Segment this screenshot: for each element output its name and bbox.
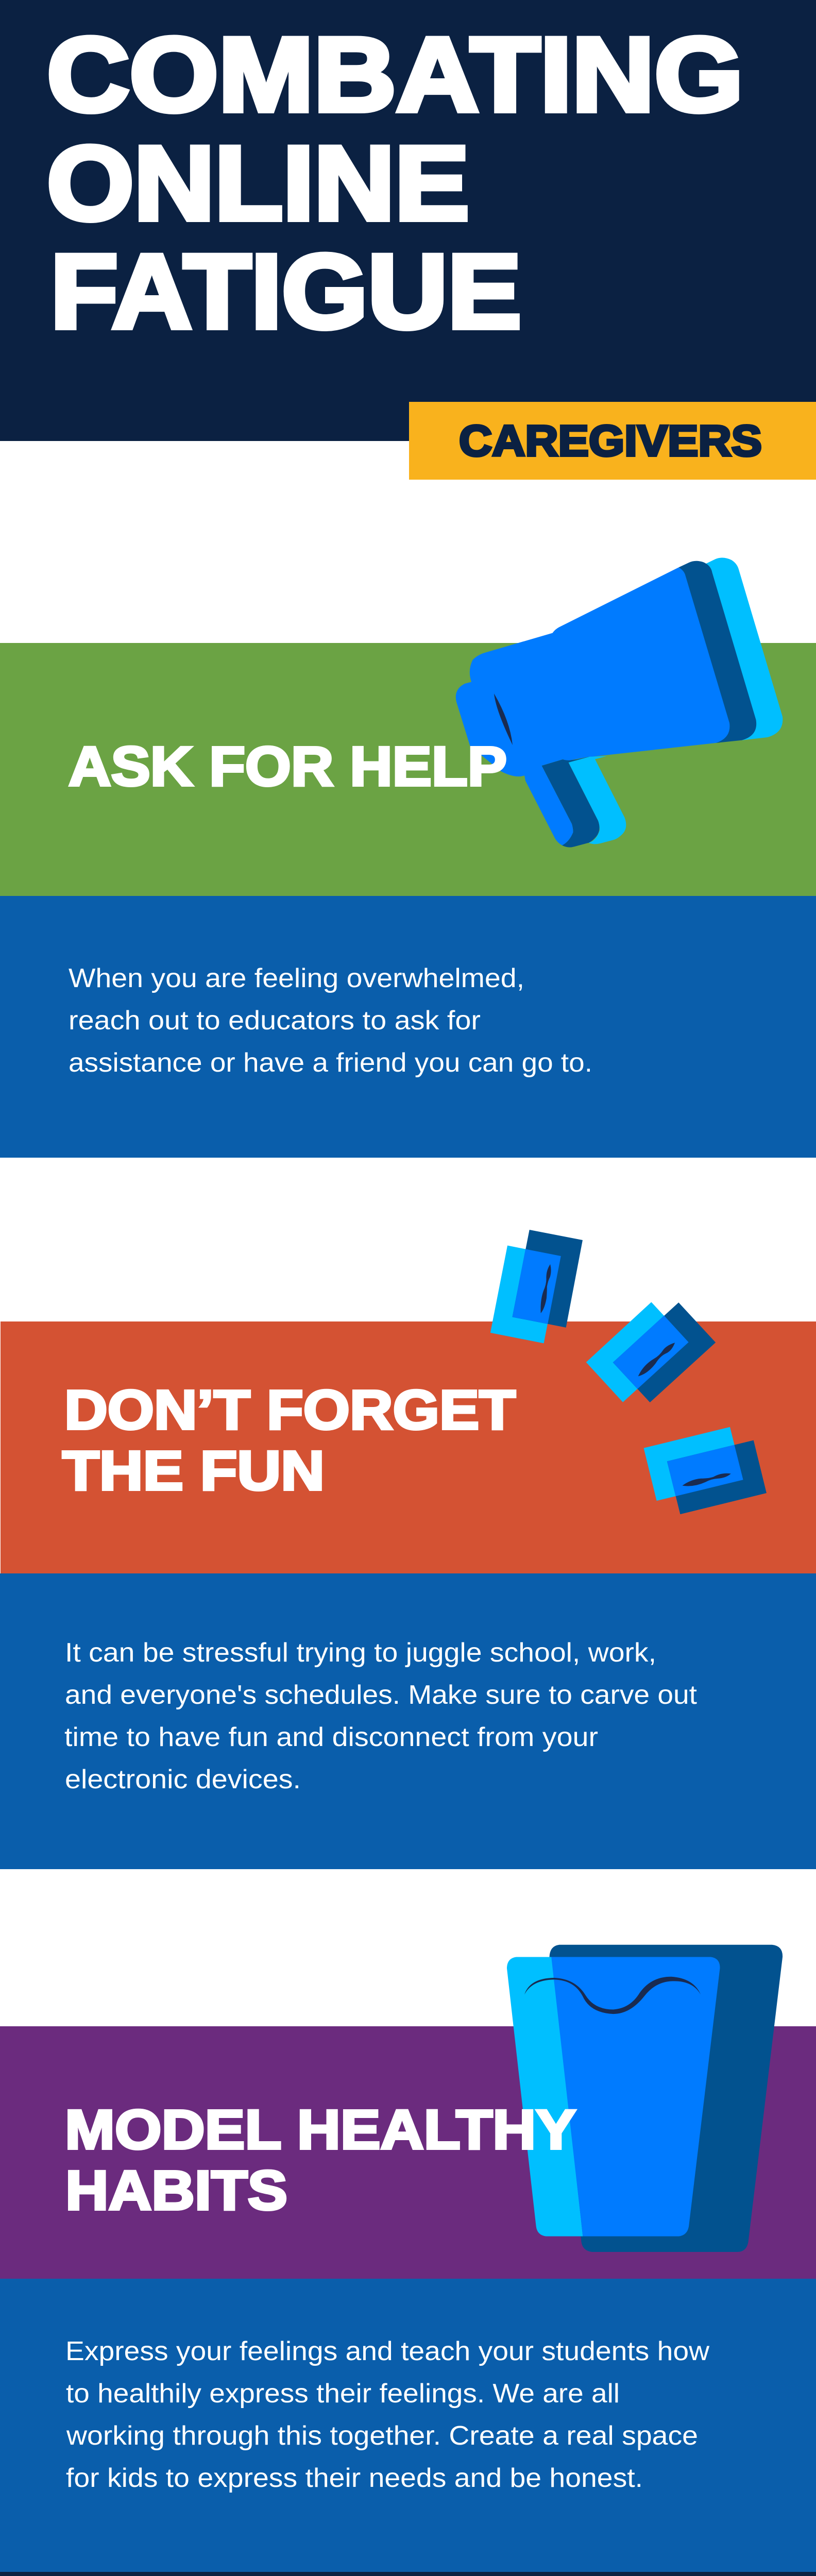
panel: model healthy habits xyxy=(0,1945,816,2572)
text block: ask for help xyxy=(0,896,816,1158)
text block: model healthy habits: Express your feelings and teach your students how xyxy=(65,2336,709,2366)
title: COMBATING xyxy=(47,16,743,133)
text block: ask for help: assistance or have a friend you can go to. xyxy=(69,1048,592,1078)
text block: don't forget the fun: It can be stressful trying to juggle school, work, xyxy=(65,1638,656,1668)
icon: three devices xyxy=(490,1230,767,1514)
heading: don't forget the fun: DON’T FORGET xyxy=(64,1379,516,1440)
text block: ask for help: When you are feeling overwhelmed, xyxy=(69,963,524,993)
text block: don't forget the fun: time to have fun and disconnect from your xyxy=(64,1722,598,1752)
panel: ask for help xyxy=(0,558,816,1158)
audience tag: caregivers xyxy=(409,402,816,480)
heading: model healthy habits xyxy=(65,2098,576,2222)
icon: megaphone xyxy=(456,558,783,848)
title xyxy=(47,16,743,350)
text block: model healthy habits: to healthily express their feelings. We are all xyxy=(66,2379,620,2409)
text block: model healthy habits xyxy=(0,2279,816,2572)
footer xyxy=(0,2572,816,2576)
header panel xyxy=(0,0,816,480)
icon: device one xyxy=(490,1230,583,1343)
text block: don't forget the fun xyxy=(0,1573,816,1869)
icon: device two xyxy=(586,1302,716,1402)
text block: model healthy habits: for kids to express their needs and be honest. xyxy=(66,2463,643,2493)
title: FATIGUE xyxy=(50,233,521,350)
heading: model healthy habits: HABITS xyxy=(65,2159,287,2222)
title: ONLINE xyxy=(47,125,469,242)
text block: model healthy habits: working through this together. Create a real space xyxy=(66,2421,698,2451)
heading: ask for help: ASK FOR HELP xyxy=(69,735,507,798)
audience tag: caregivers: CAREGIVERS xyxy=(459,416,762,465)
heading: model healthy habits: MODEL HEALTHY xyxy=(65,2098,576,2161)
text block: ask for help: reach out to educators to ask for xyxy=(69,1006,481,1036)
icon: device three xyxy=(644,1427,767,1514)
heading: don't forget the fun: THE FUN xyxy=(62,1439,325,1501)
heading: don't forget the fun xyxy=(62,1379,516,1501)
text block: don't forget the fun: and everyone's schedules. Make sure to carve out xyxy=(65,1680,698,1710)
panel: don't forget the fun xyxy=(0,1230,816,1869)
icon: drinking glass xyxy=(507,1945,783,2252)
text block: don't forget the fun: electronic devices. xyxy=(65,1765,301,1794)
